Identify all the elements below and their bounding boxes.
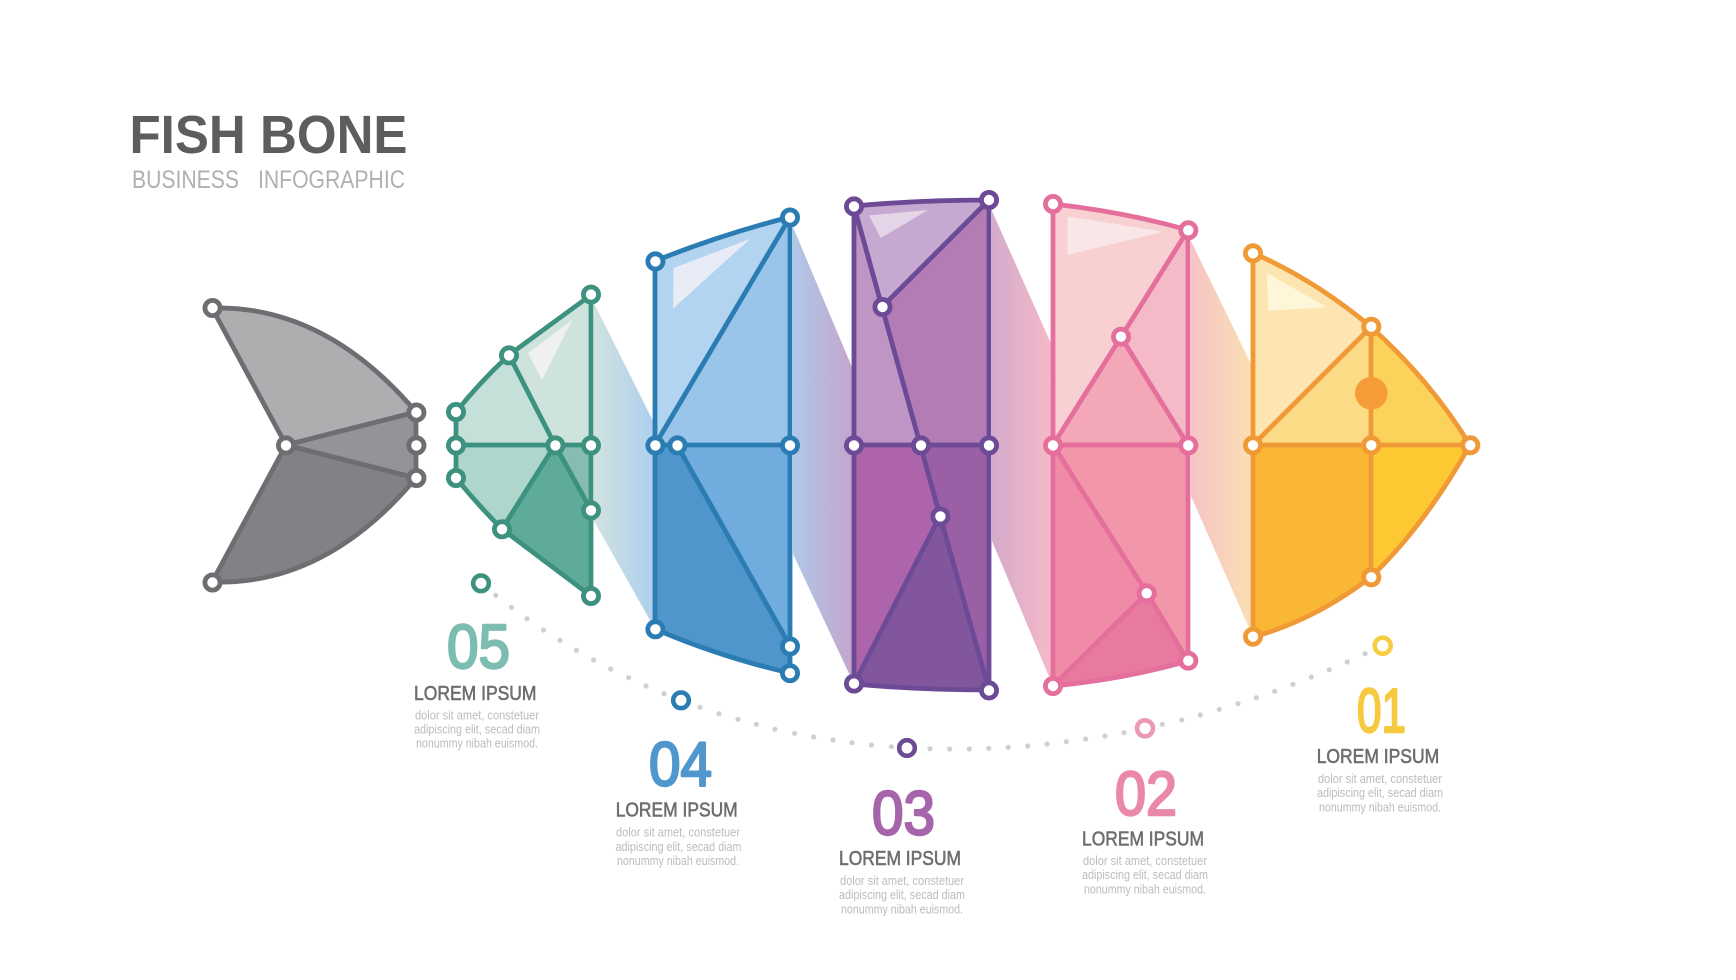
text block 03: LOREM IPSUM bbox=[839, 847, 961, 870]
segment 05: teal bbox=[448, 287, 599, 604]
subtitle: INFOGRAPHIC bbox=[258, 166, 405, 194]
connector bands between body segments bbox=[594, 211, 1253, 686]
text block 02: nonummy nibah euismod. bbox=[1084, 881, 1206, 896]
dotted timeline bbox=[493, 593, 1368, 752]
segment 02: pink bbox=[1045, 196, 1196, 694]
text block 05 bbox=[414, 613, 540, 751]
text block 05: adipiscing elit, secad diam bbox=[414, 722, 540, 736]
highlight: purple bbox=[869, 210, 928, 238]
text block 03: adipiscing elit, secad diam bbox=[839, 887, 965, 902]
text block 04: dolor sit amet, constetuer bbox=[616, 825, 741, 840]
text block 03: nonummy nibah euismod. bbox=[841, 901, 963, 916]
text block 04 bbox=[616, 731, 742, 868]
text block 04: adipiscing elit, secad diam bbox=[616, 839, 742, 854]
title: FISH BONE bbox=[130, 105, 408, 165]
text block 02: dolor sit amet, constetuer bbox=[1083, 853, 1208, 868]
fish tail bbox=[205, 300, 424, 590]
text block 02: LOREM IPSUM bbox=[1082, 828, 1204, 851]
text block 05: 05 bbox=[447, 613, 510, 682]
timeline marker 01 bbox=[1375, 638, 1391, 654]
subtitle: BUSINESS bbox=[132, 166, 239, 194]
text block 01: dolor sit amet, constetuer bbox=[1318, 771, 1443, 786]
text block 01: LOREM IPSUM bbox=[1317, 745, 1439, 768]
segment 01: yellow head bbox=[1245, 246, 1478, 644]
highlight: teal bbox=[528, 320, 572, 380]
text block 01: 01 bbox=[1357, 677, 1406, 746]
highlight: pink bbox=[1068, 216, 1163, 255]
timeline marker 03 bbox=[899, 740, 915, 756]
text block 02: 02 bbox=[1115, 760, 1177, 829]
icon: fish eye bbox=[1355, 377, 1388, 410]
text block 01: nonummy nibah euismod. bbox=[1319, 799, 1441, 814]
text block 02: adipiscing elit, secad diam bbox=[1082, 867, 1208, 882]
text block 01: adipiscing elit, secad diam bbox=[1317, 785, 1443, 800]
text block 03: 03 bbox=[872, 780, 935, 849]
text block 04: LOREM IPSUM bbox=[616, 799, 738, 822]
timeline marker 05 bbox=[473, 576, 489, 591]
text block 03 bbox=[839, 780, 965, 916]
timeline marker 02 bbox=[1137, 720, 1153, 736]
highlight: yellow bbox=[1267, 273, 1327, 311]
text block 02 bbox=[1082, 760, 1208, 896]
subtitle bbox=[132, 166, 405, 194]
segment 04: blue bbox=[648, 210, 798, 681]
highlight: blue bbox=[673, 239, 750, 309]
text block 03: dolor sit amet, constetuer bbox=[840, 873, 965, 888]
text block 05: nonummy nibah euismod. bbox=[416, 736, 538, 751]
text block 05: dolor sit amet, constetuer bbox=[415, 707, 540, 722]
segment 03: purple bbox=[846, 192, 997, 698]
timeline marker 04 bbox=[673, 692, 689, 708]
text block 01 bbox=[1317, 677, 1443, 814]
text block 04: 04 bbox=[649, 731, 712, 800]
text block 04: nonummy nibah euismod. bbox=[617, 853, 739, 868]
text block 05: LOREM IPSUM bbox=[414, 682, 536, 705]
